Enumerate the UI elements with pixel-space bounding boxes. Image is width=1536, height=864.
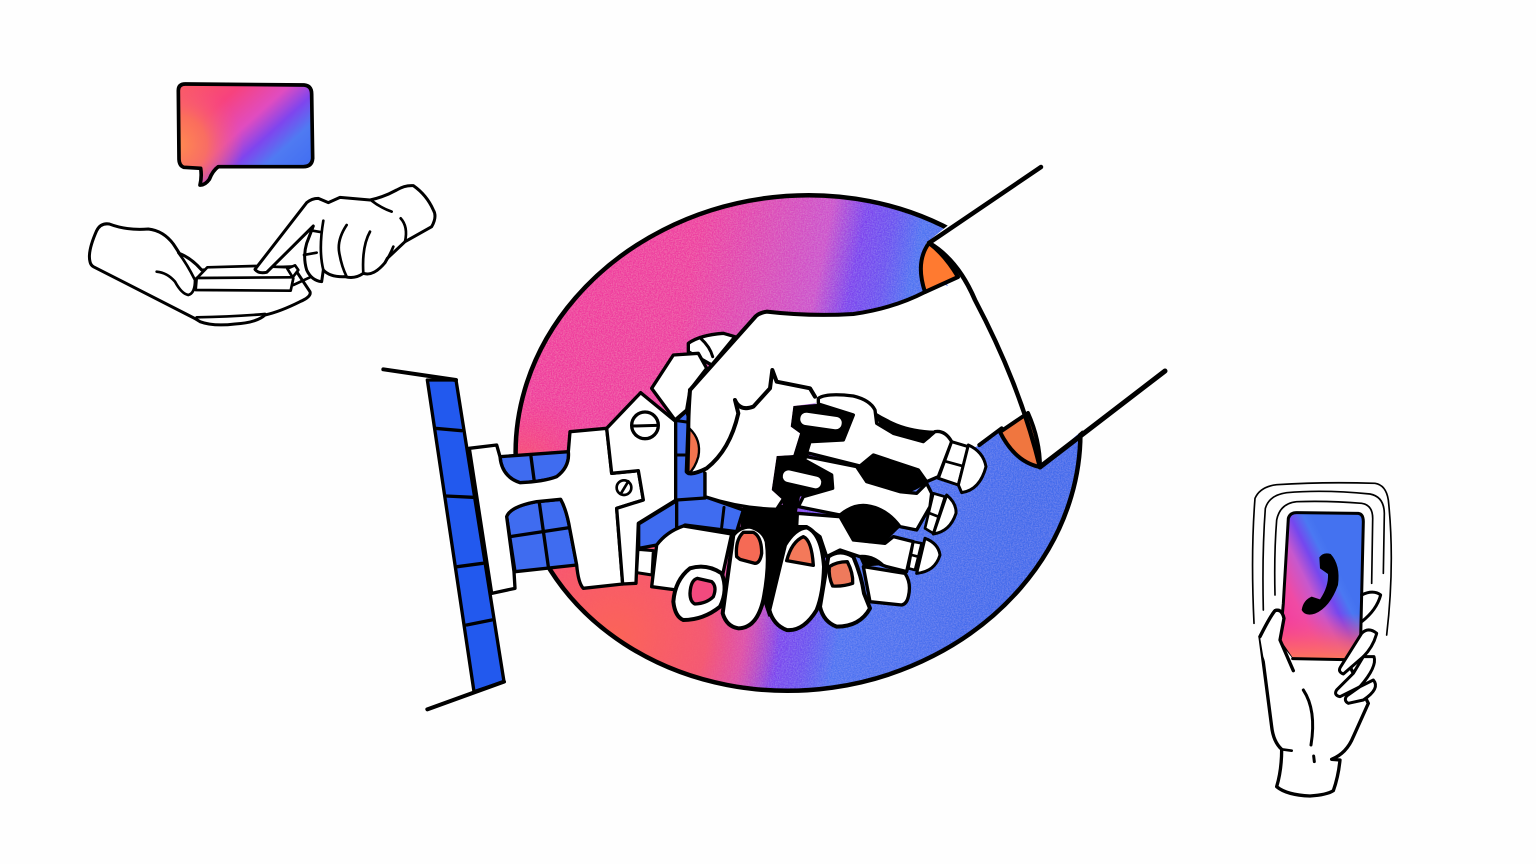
arm edge — [929, 243, 1040, 467]
icon: large screw — [632, 412, 658, 439]
incoming call phone in hand — [1253, 483, 1391, 796]
human knuckle block — [705, 370, 815, 509]
speech bubble — [178, 84, 313, 185]
thumb overlap — [1260, 610, 1293, 690]
robot arm — [383, 369, 676, 709]
white pentagon plate — [607, 393, 676, 584]
orange cuff top — [921, 243, 958, 292]
fingers — [1336, 592, 1381, 703]
fingertip 3 — [908, 538, 940, 573]
robot finger 1 — [807, 395, 986, 493]
hand back — [1260, 610, 1368, 796]
pinky with nail — [673, 567, 725, 620]
phone — [196, 265, 310, 291]
robot finger 2 — [798, 455, 956, 534]
speech bubble with hands typing on phone — [89, 84, 435, 325]
robot upper joints — [652, 333, 735, 420]
thumb — [687, 370, 815, 474]
upper sleeve line — [929, 167, 1041, 243]
robot palm block — [652, 526, 732, 590]
robot fingertip block — [863, 567, 909, 605]
solar panel — [383, 369, 504, 709]
fingertip 1 — [938, 442, 986, 493]
robot finger pads — [781, 411, 843, 490]
fingertip 2 — [925, 493, 956, 534]
robot wrist strip — [637, 549, 653, 575]
icon: phone handset — [1302, 553, 1339, 615]
middle finger with nail — [769, 527, 824, 630]
handshake — [637, 280, 1028, 630]
lower sleeve line — [1040, 371, 1165, 467]
white arm body — [469, 428, 643, 593]
human sleeve — [921, 167, 1165, 467]
vibration lines — [1253, 483, 1391, 635]
knuckle outline — [705, 473, 783, 509]
robot wrist blue panels — [639, 411, 743, 548]
phone screen — [1280, 513, 1363, 660]
top finger behind phone — [1362, 592, 1381, 622]
orange cuff bottom — [1000, 413, 1040, 467]
robot finger 3 — [797, 505, 940, 573]
icon: small screw — [617, 480, 631, 495]
human fingers — [673, 527, 870, 630]
hand pressing phone — [255, 186, 435, 282]
central gradient circle — [483, 150, 1175, 727]
hand holding phone — [89, 224, 310, 325]
arm blue joints — [500, 452, 577, 572]
human arm and hand — [687, 280, 1028, 474]
shake black gaps — [740, 404, 853, 617]
index finger with nail — [820, 552, 870, 627]
ring finger with nail — [723, 527, 768, 628]
